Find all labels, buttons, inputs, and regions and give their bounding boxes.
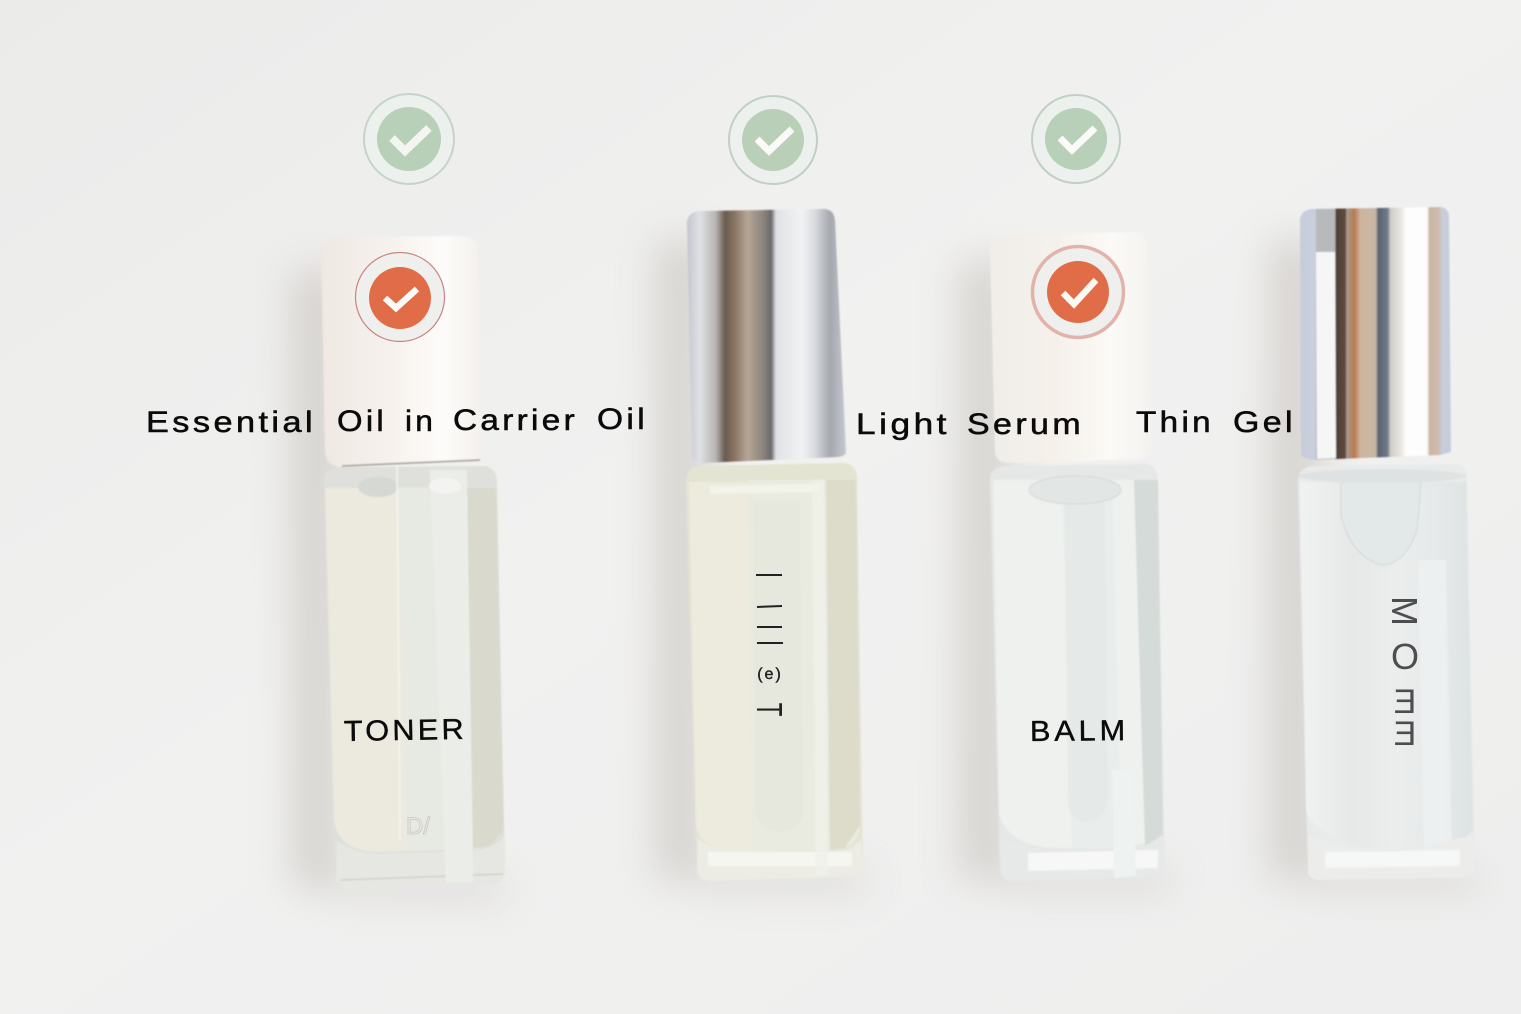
label: vertical T E text: (e): [757, 666, 783, 683]
bottle 3: balm: [990, 232, 1165, 881]
glass shapes: [324, 466, 505, 890]
icon: orange check: [356, 252, 444, 342]
white cap: [990, 232, 1152, 463]
label: vertical MOEE text: M: [1384, 596, 1425, 626]
text: Essential Oil in Carrier Oil: Carrier: [453, 404, 578, 437]
chrome cap: [1300, 207, 1451, 460]
text: Thin Gel: Gel: [1233, 406, 1296, 439]
label: vertical MOEE text: Ǝ: [1394, 715, 1416, 753]
text: Thin Gel: [1136, 406, 1296, 439]
bottle shadows: [292, 240, 1478, 898]
glass shapes: [1298, 464, 1475, 880]
text: Essential Oil in Carrier Oil: Oil: [337, 405, 387, 438]
chrome cap: [687, 209, 846, 463]
bottle 4: MOEE: [1298, 207, 1475, 880]
label: vertical MOEE text: Ǝ: [1394, 683, 1416, 721]
label: vertical T E text: [749, 575, 788, 716]
label: TONER: TONER: [344, 714, 467, 748]
text: Light Serum: [856, 408, 1084, 441]
text: Essential Oil in Carrier Oil: Essential: [146, 406, 316, 439]
label: vertical T E text: T: [749, 703, 788, 716]
text: Light Serum: Serum: [967, 408, 1084, 441]
glass shapes: [990, 464, 1165, 881]
text: Essential Oil in Carrier Oil: [146, 403, 648, 439]
label: BALM: BALM: [1030, 715, 1129, 748]
bottle 2: T E label: [686, 209, 863, 881]
icon: green check 1: [364, 94, 454, 184]
icon: green check 3: [1032, 95, 1120, 183]
label: embossed mark: D/: [406, 813, 430, 840]
text: Essential Oil in Carrier Oil: in: [405, 405, 436, 438]
white cap: [321, 236, 484, 467]
label: vertical MOEE text: [1384, 596, 1425, 753]
icon: green check 2: [729, 96, 817, 184]
icon: orange check: [1032, 246, 1124, 338]
text: Thin Gel: Thin: [1136, 406, 1214, 439]
text: Light Serum: Light: [856, 408, 950, 441]
label: vertical MOEE text: O: [1391, 636, 1419, 677]
bottle 1: toner: [321, 236, 505, 890]
glass shapes: [686, 463, 863, 881]
text: Essential Oil in Carrier Oil: Oil: [597, 403, 648, 436]
